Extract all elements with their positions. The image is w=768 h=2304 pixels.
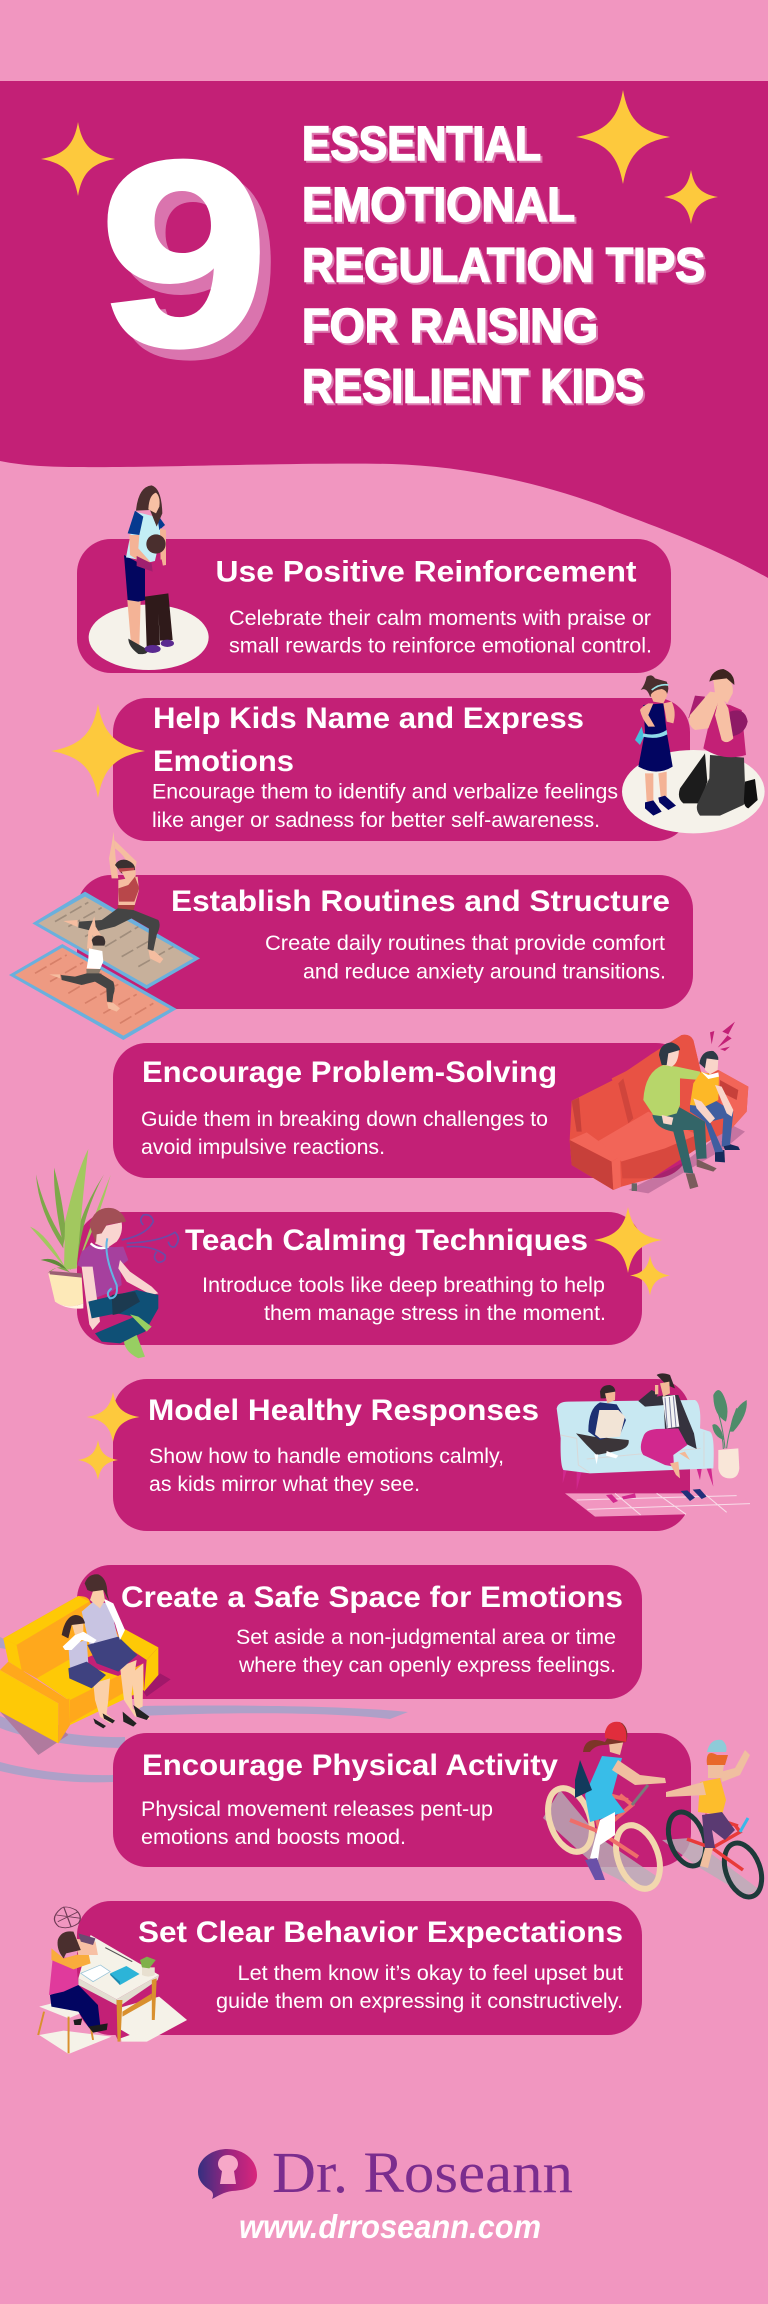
- card: [77, 875, 693, 1009]
- icon: header star large: [576, 90, 670, 184]
- body text: Encourage them to identify and verbalize feelings: [152, 780, 618, 804]
- icon: header star small: [664, 170, 718, 224]
- icon: star small: [630, 1256, 670, 1296]
- body text: Celebrate their calm moments with praise or: [229, 607, 651, 630]
- body text: like anger or sadness for better self-awareness.: [152, 809, 600, 832]
- body text: Guide them in breaking down challenges to: [141, 1108, 548, 1131]
- body text: [229, 607, 652, 658]
- icon: star upper: [86, 1392, 140, 1442]
- icon: star large: [594, 1207, 662, 1273]
- body text: Show how to handle emotions calmly,: [149, 1445, 504, 1468]
- illustration: two cyclists: [540, 1722, 768, 1902]
- card: [77, 1901, 642, 2035]
- body text: [141, 1798, 493, 1849]
- panel: teach calming techniques: [30, 1149, 670, 1358]
- icon: star lower: [78, 1440, 118, 1480]
- panel: encourage physical activity: [113, 1722, 768, 1902]
- body text: Create daily routines that provide comfort: [265, 932, 665, 955]
- illustration: yoga on mats: [9, 832, 200, 1040]
- title: ESSENTIAL: [302, 118, 541, 171]
- body text: and reduce anxiety around transitions.: [303, 960, 666, 984]
- body text: Physical movement releases pent-up: [141, 1798, 493, 1821]
- illustration: stressed person at desk: [38, 1907, 187, 2054]
- icon: header star left: [41, 122, 115, 196]
- card: [113, 1733, 691, 1867]
- card: [77, 1212, 642, 1345]
- body text: [236, 1626, 616, 1677]
- body text: as kids mirror what they see.: [149, 1473, 420, 1496]
- body text: them manage stress in the moment.: [264, 1302, 606, 1325]
- title: EMOTIONAL: [302, 179, 575, 232]
- panel: model healthy responses: [78, 1373, 767, 1531]
- panel: establish routines and structure: [9, 832, 693, 1040]
- body text: [216, 1962, 623, 2013]
- body text: [202, 1274, 606, 1325]
- title: RESILIENT KIDS: [302, 360, 644, 414]
- logo: Dr. Roseann: [198, 2140, 573, 2205]
- panel: set clear behavior expectations: [38, 1901, 642, 2054]
- body text: Let them know it’s okay to feel upset but: [238, 1962, 623, 1985]
- panel: encourage problem-solving: [113, 1015, 765, 1200]
- illustration: mother hugging child: [89, 485, 209, 670]
- body text: [141, 1108, 548, 1159]
- logo wordmark: Dr. Roseann: [272, 2140, 573, 2205]
- card: [113, 1379, 690, 1531]
- website: www.drroseann.com: [239, 2208, 541, 2245]
- illustration: two people talking on a sofa: [557, 1373, 767, 1517]
- body text: [265, 932, 666, 984]
- big number 9: 9: [99, 107, 269, 401]
- body text: guide them on expressing it constructively.: [216, 1990, 623, 2013]
- heading: Set Clear Behavior Expectations: [138, 1916, 623, 1949]
- body text: small rewards to reinforce emotional control.: [229, 634, 652, 658]
- heading: Encourage Physical Activity: [142, 1749, 558, 1782]
- icon: keyhole speech bubble: [198, 2149, 257, 2199]
- illustration: father and son on red sofa: [570, 1015, 765, 1200]
- heading: Use Positive Reinforcement: [216, 556, 637, 588]
- heading: [153, 702, 584, 778]
- card: [113, 1043, 690, 1178]
- panel: use positive reinforcement: [77, 485, 671, 673]
- body text: avoid impulsive reactions.: [141, 1136, 385, 1159]
- card: [77, 539, 671, 673]
- heading: Model Healthy Responses: [148, 1394, 539, 1427]
- heading: Create a Safe Space for Emotions: [121, 1581, 623, 1614]
- icon: star: [51, 704, 145, 798]
- illustration: crying girl and kneeling man: [622, 669, 765, 833]
- body text: [152, 780, 618, 832]
- heading: Teach Calming Techniques: [185, 1224, 588, 1257]
- title: REGULATION TIPS: [302, 240, 705, 292]
- card: [113, 698, 690, 841]
- body text: where they can openly express feelings.: [238, 1654, 616, 1677]
- heading: Encourage Problem-Solving: [142, 1056, 557, 1089]
- illustration: mother and daughter on yellow sofa: [0, 1574, 171, 1755]
- illustration: breathing person with plant: [30, 1149, 178, 1358]
- body text: [149, 1445, 504, 1496]
- header band: [0, 81, 768, 578]
- decorative swoosh behind cards: [0, 1637, 408, 1782]
- body text: Set aside a non-judgmental area or time: [236, 1626, 616, 1649]
- card: [77, 1565, 642, 1699]
- body text: emotions and boosts mood.: [141, 1826, 406, 1849]
- panel: help kids name and express emotions: [51, 669, 765, 841]
- heading: Establish Routines and Structure: [171, 885, 670, 918]
- heading: Emotions: [153, 745, 294, 778]
- heading: Help Kids Name and Express: [153, 702, 584, 735]
- title: FOR RAISING: [302, 300, 598, 353]
- title: [302, 118, 705, 414]
- panel: create a safe space for emotions: [0, 1565, 642, 1755]
- body text: Introduce tools like deep breathing to help: [202, 1274, 605, 1297]
